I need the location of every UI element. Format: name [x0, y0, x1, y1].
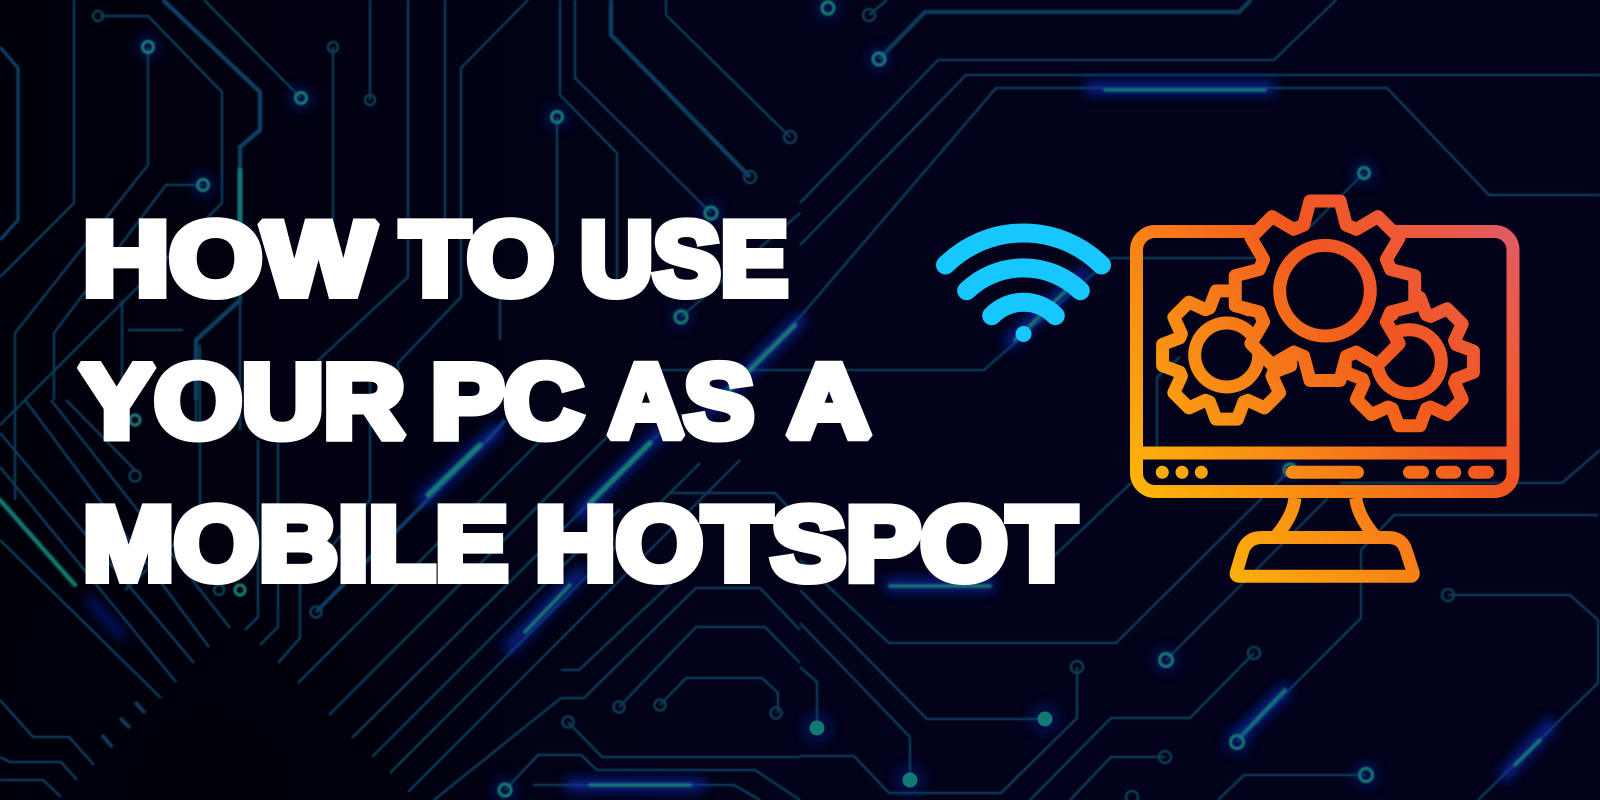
top-left traces: [0, 47, 18, 240]
title: HOTSPOT: [535, 486, 1076, 602]
central diagonal traces: [245, 440, 258, 630]
large gear: [1235, 201, 1415, 380]
title: MOBILE: [83, 486, 508, 602]
title: A: [787, 343, 871, 459]
title: USE: [580, 200, 788, 316]
title: YOUR: [79, 343, 405, 459]
title: [79, 200, 1076, 602]
bottom-right traces: [800, 470, 1290, 643]
title: HOW: [83, 200, 375, 316]
top-right traces: [800, 0, 1336, 203]
title: PC: [431, 343, 583, 459]
title: TO: [401, 200, 554, 316]
icon: monitor with gears: [1136, 201, 1513, 576]
monitor stand: [1236, 498, 1413, 576]
small gears: [1163, 291, 1473, 426]
title: AS: [608, 343, 754, 459]
indicator dots: [1156, 466, 1208, 479]
left and bottom-left traces: [25, 400, 209, 647]
monitor frame: [1136, 232, 1513, 492]
icon: wifi signal: [946, 233, 1102, 342]
